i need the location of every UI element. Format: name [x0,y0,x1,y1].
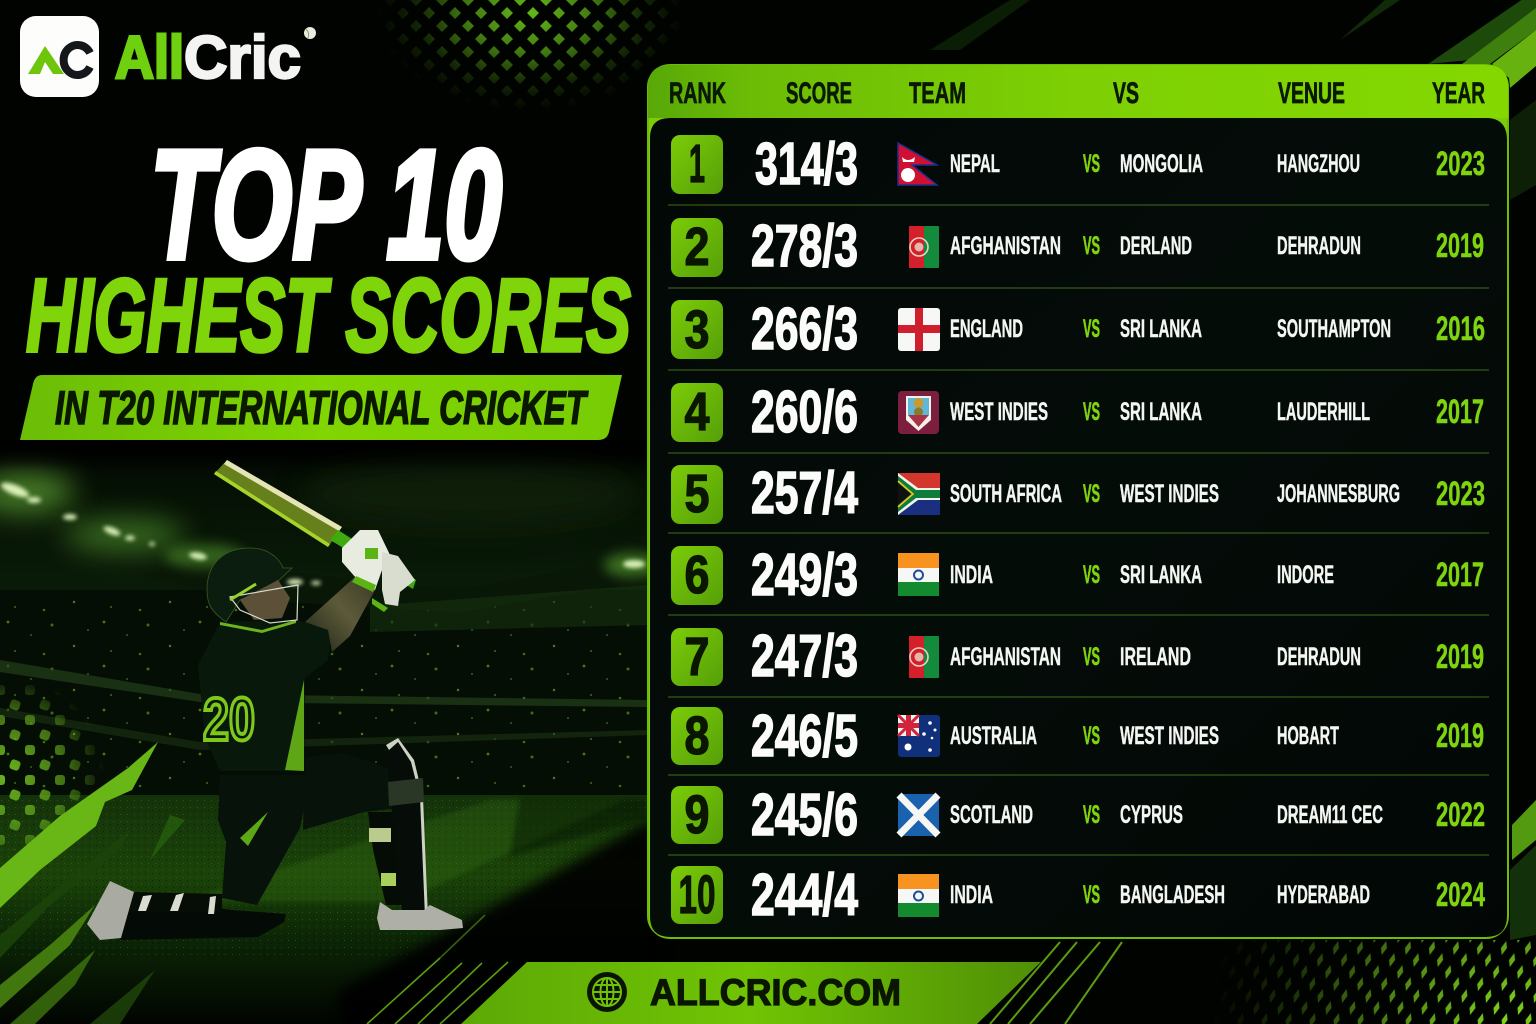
row 2: DERLAND [1120,232,1192,260]
row 4: VS [1083,398,1100,426]
back leg and thigh [218,775,311,905]
row 8: HOBART [1277,722,1339,750]
icon: globe [587,972,627,1012]
row 7: AFGHANISTAN [950,643,1061,671]
flag: India [898,874,939,917]
row 3: ENGLAND [950,315,1023,343]
gloves [342,530,415,612]
row 5 [671,460,1485,526]
row 5: SOUTH AFRICA [950,480,1062,508]
row 6: 6 [684,545,710,605]
row 9: 245/6 [751,782,858,848]
row 7: VS [1083,643,1100,671]
row 6: INDORE [1277,561,1334,589]
face and grille [230,580,298,623]
row 5: VS [1083,480,1100,508]
header labels: YEAR [1432,77,1485,110]
row 4: 260/6 [751,379,858,445]
row 2: 278/3 [751,213,858,279]
helmet [207,548,292,622]
row 8: AUSTRALIA [950,722,1037,750]
flag: South Africa [898,473,940,515]
row 4: SRI LANKA [1120,398,1202,426]
header labels: VS [1113,77,1139,110]
row 4: WEST INDIES [950,398,1048,426]
back shin guard [118,906,286,940]
row 10: 2024 [1436,876,1485,914]
header labels: RANK [669,77,726,110]
logo [20,16,316,97]
title: top 10: TOP 10 [150,118,502,291]
cricket batsman [87,460,463,940]
row 9 [671,782,1485,848]
website address: ALLCRIC.COM [650,972,901,1013]
halftone: bottom right [1230,940,1536,1024]
row 7: 247/3 [751,623,858,689]
row 2: VS [1083,232,1100,260]
arms [305,576,375,652]
header labels: VENUE [1278,77,1345,110]
subtitle text: IN T20 INTERNATIONAL CRICKET [55,381,589,434]
row 4: 2017 [1436,393,1484,431]
row 10 [671,862,1485,928]
row 8: 2019 [1436,717,1484,755]
row 9: 2022 [1436,796,1485,834]
row 1: 314/3 [755,131,858,197]
panel: scores table [648,65,1508,938]
header bar [648,65,1508,118]
row 1: VS [1083,150,1100,178]
row 3: SRI LANKA [1120,315,1202,343]
flag: England [898,308,940,351]
flag: Australia [898,715,940,757]
halftone: top [387,0,673,104]
row 10: HYDERABAD [1277,881,1370,909]
row 3: 3 [684,300,710,360]
footer banner [461,962,1041,1024]
row 5: 257/4 [751,460,858,526]
subtitle banner [20,375,622,440]
flag: Scotland [898,794,939,836]
row 8: VS [1083,722,1100,750]
row 8 [671,703,1484,769]
row 7 [671,623,1484,689]
logo cricket ball [304,27,316,39]
row 9: VS [1083,801,1100,829]
row 10: INDIA [950,881,993,909]
row 8: 8 [684,706,710,766]
row 8: WEST INDIES [1120,722,1219,750]
back shoe [87,881,134,940]
logo wordmark white: Cric [184,24,301,91]
front shin [368,812,416,905]
green paint slashes: bottom left [0,742,185,1024]
row 1: MONGOLIA [1120,150,1203,178]
front shoe [377,902,463,930]
table body [650,118,1507,937]
row 1: NEPAL [950,150,1000,178]
row 9: CYPRUS [1120,801,1183,829]
flag: Afghanistan [909,636,939,678]
row 10: BANGLADESH [1120,881,1225,909]
row 10: 244/4 [751,862,858,928]
stadium scene [0,440,660,1024]
torso with jersey [198,620,332,771]
row 3: VS [1083,315,1100,343]
row 1 [671,131,1485,197]
row 6: VS [1083,561,1100,589]
thin diagonal stripes beside footer: left [367,915,508,1024]
jersey number: 20 [203,686,255,753]
row 5: WEST INDIES [1120,480,1219,508]
row 9: 9 [684,785,710,845]
row 4: LAUDERHILL [1277,398,1370,426]
row 3: SOUTHAMPTON [1277,315,1391,343]
logo icon [20,16,99,97]
row 4 [671,379,1484,445]
header labels: SCORE [786,77,852,110]
row 1: 2023 [1436,145,1485,183]
header labels [669,77,1485,110]
row 5: JOHANNESBURG [1277,480,1400,508]
row 6 [671,542,1484,608]
front thigh [303,753,392,830]
row 2: AFGHANISTAN [950,232,1061,260]
row 6: INDIA [950,561,993,589]
row 5: 2023 [1436,475,1485,513]
flag: Afghanistan [909,226,939,268]
row 2: DEHRADUN [1277,232,1361,260]
row 6: 2017 [1436,556,1484,594]
row 1: HANGZHOU [1277,150,1360,178]
row 7: 2019 [1436,638,1484,676]
flag: India [898,553,939,596]
row 7: DEHRADUN [1277,643,1361,671]
green paint slashes: top right [930,0,1536,940]
row 3 [671,296,1485,362]
row 7: 7 [684,627,710,687]
row 2: 2019 [1436,227,1484,265]
row 6: SRI LANKA [1120,561,1202,589]
row 1: 1 [689,134,705,194]
front pad [386,738,428,920]
row dividers [668,205,1489,855]
flag: Nepal [898,143,937,185]
row 9: SCOTLAND [950,801,1033,829]
bat [214,460,416,589]
row 3: 266/3 [751,296,858,362]
row 2 [671,213,1484,279]
header labels: TEAM [909,77,966,110]
flag: West Indies [898,391,939,434]
row 10: VS [1083,881,1100,909]
row 6: 249/3 [751,542,858,608]
thin diagonal stripes beside footer: right [990,942,1122,1024]
row 3: 2016 [1436,310,1485,348]
row 8: 246/5 [751,703,858,769]
row 5: 5 [684,464,710,524]
row 9: DREAM11 CEC [1277,801,1383,829]
row 10: 10 [678,865,716,925]
logo wordmark green: All [115,24,184,91]
halftone: left [0,680,110,850]
title: highest scores: HIGHEST SCORES [26,258,631,374]
table frame [648,65,1508,938]
row 7: IRELAND [1120,643,1191,671]
row 2: 2 [684,217,710,277]
row 4: 4 [684,382,710,442]
